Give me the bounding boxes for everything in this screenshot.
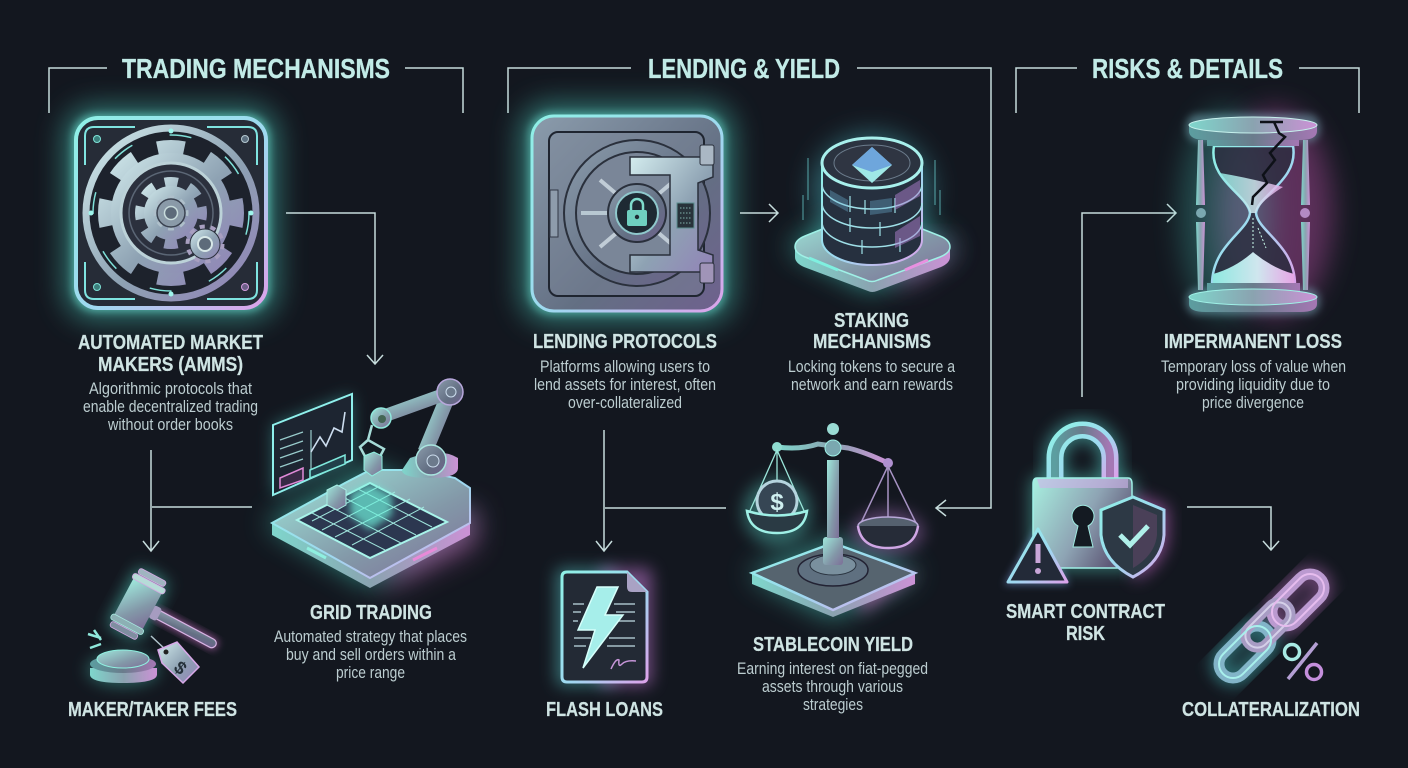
label: smart contract risk: SMART CONTRACT	[1006, 601, 1165, 623]
connector: stablecoin yield to flash loans	[596, 430, 726, 551]
text: lending protocols: over-collateralized	[568, 393, 682, 412]
panel: trading mechanisms	[49, 53, 476, 721]
arrow: AMMs to grid trading	[286, 213, 383, 364]
icon: balance scales	[743, 423, 924, 618]
text: stablecoin yield: STABLECOIN YIELD	[753, 634, 913, 656]
icon: flash loan document	[556, 568, 652, 686]
text: impermanent loss: providing liquidity due to	[1176, 375, 1330, 394]
text: lending protocols	[533, 331, 717, 412]
icon: chain links and percent	[1213, 568, 1330, 684]
heading: trading mechanisms	[49, 53, 463, 113]
text: staking mechanisms: STAKING	[834, 310, 909, 332]
icon: balance scales: $	[770, 489, 784, 516]
icon: staking coin stack	[788, 135, 960, 292]
text: impermanent loss: IMPERMANENT LOSS	[1164, 331, 1342, 353]
heading: risks and details: RISKS & DETAILS	[1092, 53, 1283, 84]
text: automated market makers	[78, 332, 263, 434]
text: impermanent loss	[1161, 331, 1346, 412]
text: lending protocols: Platforms allowing users to	[540, 357, 710, 376]
label: maker taker fees: MAKER/TAKER FEES	[68, 699, 237, 721]
text: grid trading: buy and sell orders within a	[286, 645, 456, 664]
panel: risks and details	[1004, 53, 1360, 721]
text: lending protocols: LENDING PROTOCOLS	[533, 331, 717, 353]
text: lending protocols: lend assets for interest, often	[534, 375, 716, 394]
icon: gavel and price tag	[87, 566, 233, 686]
text: automated market makers: AUTOMATED MARKET	[78, 332, 263, 354]
icon: grid trading robot arm	[266, 379, 476, 592]
text: stablecoin yield: assets through various	[762, 677, 903, 696]
connector: grid trading to maker taker fees	[143, 450, 252, 551]
label: smart contract risk	[1006, 601, 1165, 645]
text: automated market makers: Algorithmic protocols that	[89, 379, 252, 398]
text: grid trading: price range	[336, 663, 405, 682]
arrow: lending to staking	[740, 204, 778, 222]
text: staking mechanisms	[788, 310, 955, 394]
label: smart contract risk: RISK	[1066, 623, 1105, 645]
panel: lending and yield	[508, 53, 991, 721]
icon: cracked hourglass	[1180, 108, 1333, 318]
icon: automated market maker gears	[64, 106, 278, 320]
text: stablecoin yield	[737, 634, 928, 714]
text: automated market makers: enable decentralized trading	[83, 397, 258, 416]
text: grid trading: GRID TRADING	[310, 602, 432, 624]
arrow: smart contract risk to collateralization	[1187, 507, 1279, 550]
label: collateralization: COLLATERALIZATION	[1182, 699, 1360, 721]
text: grid trading	[274, 602, 467, 682]
heading: risks and details	[1016, 53, 1359, 113]
text: impermanent loss: price divergence	[1202, 393, 1304, 412]
text: stablecoin yield: Earning interest on fiat-pegged	[737, 659, 928, 678]
text: automated market makers: without order books	[107, 415, 233, 434]
icon: gavel and price tag: $	[170, 657, 191, 679]
label: flash loans: FLASH LOANS	[546, 699, 663, 721]
arrow: smart contract risk to impermanent loss	[1082, 204, 1176, 397]
icon: bank vault	[520, 103, 734, 323]
text: staking mechanisms: MECHANISMS	[813, 331, 931, 353]
heading: trading mechanisms: TRADING MECHANISMS	[122, 53, 390, 84]
heading: lending and yield	[508, 53, 991, 516]
text: impermanent loss: Temporary loss of value when	[1161, 357, 1346, 376]
text: staking mechanisms: network and earn rewards	[791, 375, 953, 394]
icon: padlock with shield and warning	[1004, 430, 1168, 585]
text: grid trading: Automated strategy that places	[274, 627, 467, 646]
text: stablecoin yield: strategies	[803, 695, 863, 714]
text: staking mechanisms: Locking tokens to secure a	[788, 357, 955, 376]
heading: lending and yield: LENDING & YIELD	[648, 53, 840, 84]
text: automated market makers: MAKERS (AMMS)	[98, 354, 243, 376]
